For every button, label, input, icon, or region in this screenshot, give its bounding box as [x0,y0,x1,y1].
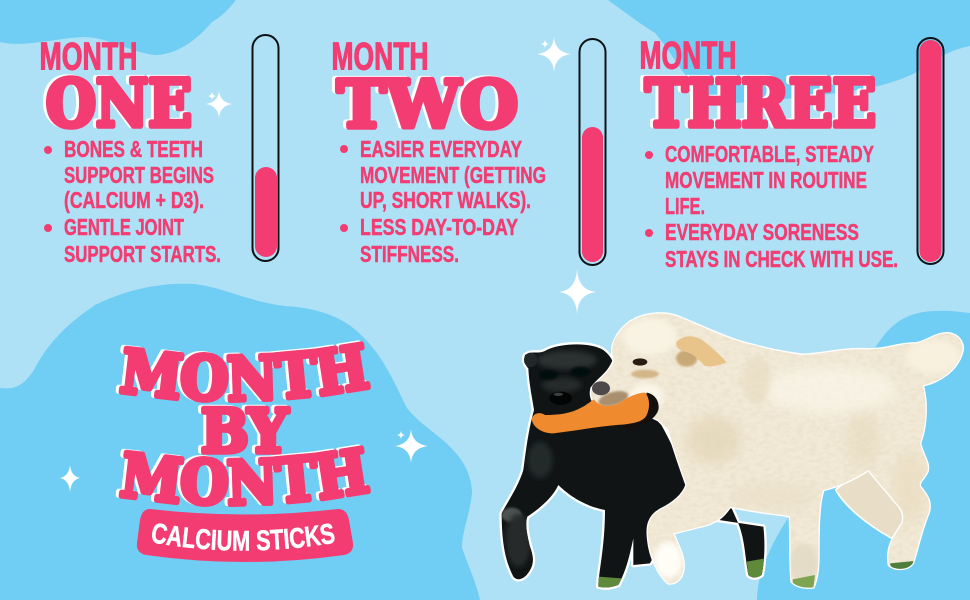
bullet list text: first: COMFORTABLE, STEADY [665,141,874,167]
sparkle: month two [537,37,571,72]
nose [592,381,610,395]
bullet dot [340,224,348,232]
eye [633,358,647,366]
bullet list text: first: MOVEMENT IN ROUTINE [665,167,867,193]
bullet list text: second [360,214,518,267]
heading: month two: MONTH [332,36,428,78]
blob: top right [608,0,970,103]
fur shading [592,315,960,562]
bullet dot [645,229,653,237]
progress tube: month two [580,39,606,265]
title: month by month [116,340,371,507]
sparkle: centre [559,269,596,314]
bullet list text: second: STIFFNESS. [360,241,459,267]
bullet list text: first [64,136,214,213]
black dog [502,344,765,588]
panel: month one [40,35,278,267]
bullet list text: second [64,214,221,267]
bullet list text: second: SUPPORT STARTS. [64,241,221,267]
bullet list text: first: BONES & TEETH [64,136,203,162]
badge: calcium sticks [136,509,354,562]
heading: month one: MONTH [40,36,138,78]
bullet list text: first: (CALCIUM + D3). [64,187,204,213]
title line: month: MONTH [116,444,371,507]
title line: by: BY [201,397,289,467]
bullet list text: first: UP, SHORT WALKS). [360,187,531,213]
blob: top left [0,0,236,55]
blob: lower right [757,311,970,600]
bullet list text: second: GENTLE JOINT [64,214,184,240]
title: one: ONE [46,66,192,142]
progress tube: month one [252,35,278,261]
title line: month: MONTH [116,340,371,403]
bullet list text: second: EVERYDAY SORENESS [665,219,859,245]
blob: lower left [0,284,480,600]
white dog [590,310,967,590]
bullet dot [645,151,653,159]
bullet dot [44,224,52,232]
sparkle: title right [395,429,428,463]
title: three: THREE [645,66,876,142]
bullet dot [340,145,348,153]
bullet list text: first: EASIER EVERYDAY [360,136,522,162]
badge: calcium sticks: CALCIUM STICKS [152,523,335,551]
ear [676,336,727,366]
bullet list text: first [360,136,546,213]
mouth [617,393,659,429]
bullet dot [44,146,52,154]
toy: orange stick [532,393,649,433]
bullet list text: first: SUPPORT BEGINS [64,162,214,188]
bullet list text: first: MOVEMENT (GETTING [360,162,546,188]
bullet list text: second [665,219,898,272]
bullet list text: first: LIFE. [665,193,705,219]
progress tube: month three [918,38,944,264]
bullet list text: first [665,141,874,219]
panel: month two [332,36,606,267]
sparkle: month one [206,91,232,118]
heading: month three: MONTH [640,34,736,78]
title: two: TWO [337,67,518,143]
panel: month three [640,34,944,272]
far hind leg [837,467,903,537]
black dog nose [549,392,572,405]
sparkle: title left [60,465,80,492]
bullet list text: second: LESS DAY-TO-DAY [360,214,518,240]
photo: two dogs carrying orange toy [502,310,967,590]
muzzle tan patch [597,388,630,409]
